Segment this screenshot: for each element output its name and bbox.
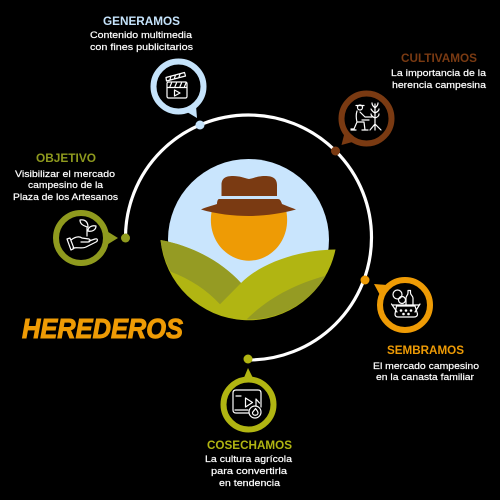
step: objetivo: [13, 153, 130, 263]
text: objetivo: [13, 169, 118, 202]
right leaf shade: [247, 276, 326, 319]
dot: cosechamos: [244, 354, 252, 364]
dot: objetivo: [121, 234, 130, 242]
text: cosechamos: [205, 454, 293, 488]
heading: generamos: GENERAMOS: [103, 16, 180, 28]
bubble: sembramos: [374, 280, 430, 330]
step: cultivamos: [331, 53, 487, 156]
text: objetivo: campesino de la: [28, 180, 104, 190]
text: cosechamos: La cultura agrícola: [205, 454, 293, 464]
farmer hat: [201, 176, 296, 216]
heading: sembramos: SEMBRAMOS: [387, 345, 464, 357]
icon: farmer planting: [351, 103, 381, 130]
farmer head: [211, 212, 287, 261]
text: sembramos: El mercado campesino: [373, 361, 479, 371]
heading: cosechamos: COSECHAMOS: [207, 440, 292, 452]
icon: video with flame: [233, 390, 261, 418]
icon: basket of produce: [392, 290, 420, 317]
bubble: cosechamos: [224, 368, 274, 430]
step: generamos: [90, 16, 204, 130]
heading: cultivamos: CULTIVAMOS: [401, 53, 477, 65]
text: generamos: [90, 30, 193, 52]
text: cosechamos: para convertirla: [211, 466, 288, 476]
text: objetivo: Plaza de los Artesanos: [13, 192, 118, 202]
text: sembramos: [373, 361, 479, 382]
text: generamos: Contenido multimedia: [90, 30, 193, 40]
dot: sembramos: [360, 276, 370, 284]
central illustration: farmer and leaves: [160, 159, 336, 320]
leaves bowl: [160, 240, 336, 320]
heading: objetivo: OBJETIVO: [36, 153, 96, 165]
left leaf shade: [160, 240, 241, 304]
text: sembramos: en la canasta familiar: [376, 372, 474, 382]
icon: hand with sprout: [67, 220, 97, 250]
bubble: cultivamos: [342, 94, 392, 145]
bubble: generamos: [154, 62, 204, 118]
step: sembramos: [360, 276, 479, 382]
text: generamos: con fines publicitarios: [90, 42, 193, 52]
step: cosechamos: [205, 354, 293, 488]
text: cosechamos: en tendencia: [219, 478, 281, 488]
icon: clapperboard: [166, 72, 187, 98]
timeline ring arc: [125, 115, 371, 360]
bubble: objetivo: [56, 213, 118, 263]
text: objetivo: Visibilizar el mercado: [15, 169, 115, 179]
dot: cultivamos: [331, 146, 340, 156]
text: cultivamos: herencia campesina: [392, 80, 487, 90]
dot: generamos: [196, 120, 204, 130]
text: cultivamos: La importancia de la: [391, 68, 487, 78]
text: cultivamos: [391, 68, 487, 90]
title: HEREDEROS: [22, 313, 183, 344]
